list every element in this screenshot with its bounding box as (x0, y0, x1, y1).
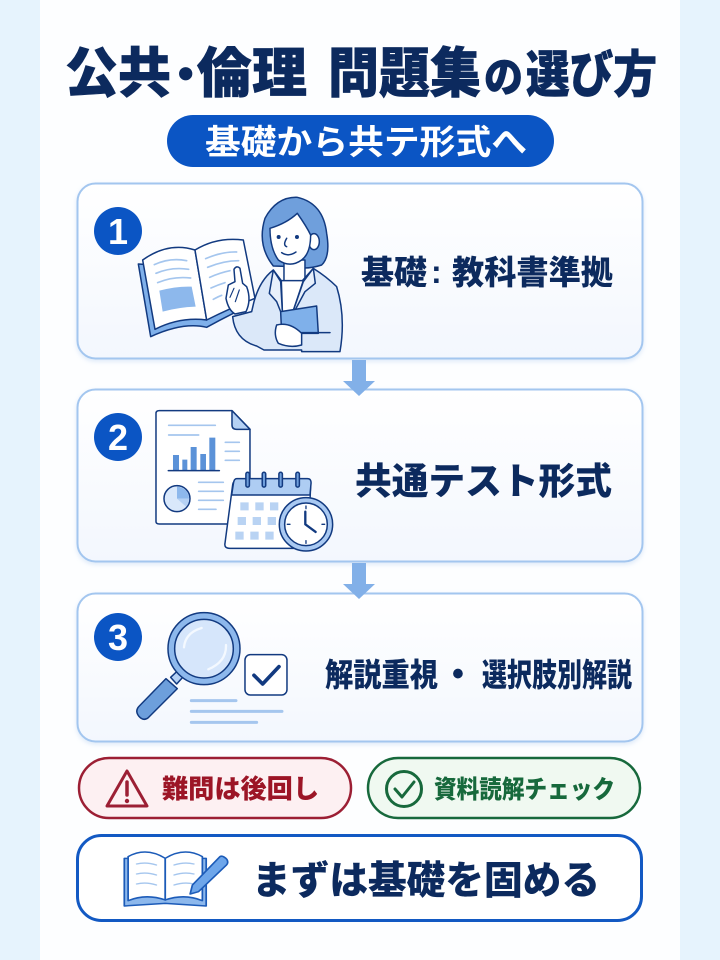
badge 1: 1 (108, 211, 128, 252)
badge 2: 2 (108, 417, 128, 458)
arrow: step 2 to 3 (343, 563, 375, 599)
icon: magnifier and checkbox (137, 613, 287, 722)
teacher (226, 197, 342, 352)
step 2 label: 共通テスト形式 (355, 461, 612, 502)
arrow: step 1 to 2 (343, 360, 375, 396)
conclusion box (78, 836, 642, 920)
title: 公共 (65, 44, 171, 104)
title: • (178, 49, 193, 98)
callout: warning: 難問は後回し (162, 774, 319, 804)
icon: open book and teacher (138, 197, 342, 352)
step 1 label (361, 254, 613, 291)
book (138, 239, 255, 337)
step 1 label: 基礎 (361, 254, 427, 291)
text lines (191, 701, 282, 722)
document (156, 411, 250, 524)
icon: warning triangle (107, 771, 147, 806)
calendar (225, 474, 311, 548)
step 3 label: 選択肢別解説 (482, 657, 632, 693)
step 3 label: • (452, 655, 464, 693)
title: 選び方 (526, 47, 657, 103)
panel: step 2 (78, 390, 642, 562)
badge 3 (94, 613, 142, 661)
magnifier (137, 613, 240, 719)
conclusion box: まずは基礎を固める (252, 860, 600, 903)
subtitle pill: 基礎から共テ形式へ (205, 124, 527, 162)
badge 1 (94, 207, 142, 255)
subtitle pill (167, 115, 554, 167)
callout: warning (79, 758, 351, 818)
step 1 label: : (431, 254, 442, 290)
checkbox (245, 655, 287, 695)
step 1 label: 教科書準拠 (452, 254, 613, 291)
step 3 label (325, 655, 632, 693)
title: 問題集 (328, 44, 481, 104)
badge 3: 3 (108, 617, 128, 658)
icon: check circle (386, 772, 422, 806)
icon: book and pencil (124, 852, 228, 906)
icon: document and calendar with clock (156, 411, 333, 551)
panel: step 1 (78, 184, 642, 358)
clock (279, 498, 333, 551)
callout: check: 資料読解チェック (434, 776, 615, 804)
title: 倫理 (197, 44, 307, 104)
panel: step 3 (78, 594, 642, 742)
title: の (484, 54, 523, 101)
badge 2 (94, 413, 142, 461)
step 3 label: 解説重視 (325, 657, 438, 693)
title (65, 44, 657, 104)
callout: check (368, 758, 640, 818)
